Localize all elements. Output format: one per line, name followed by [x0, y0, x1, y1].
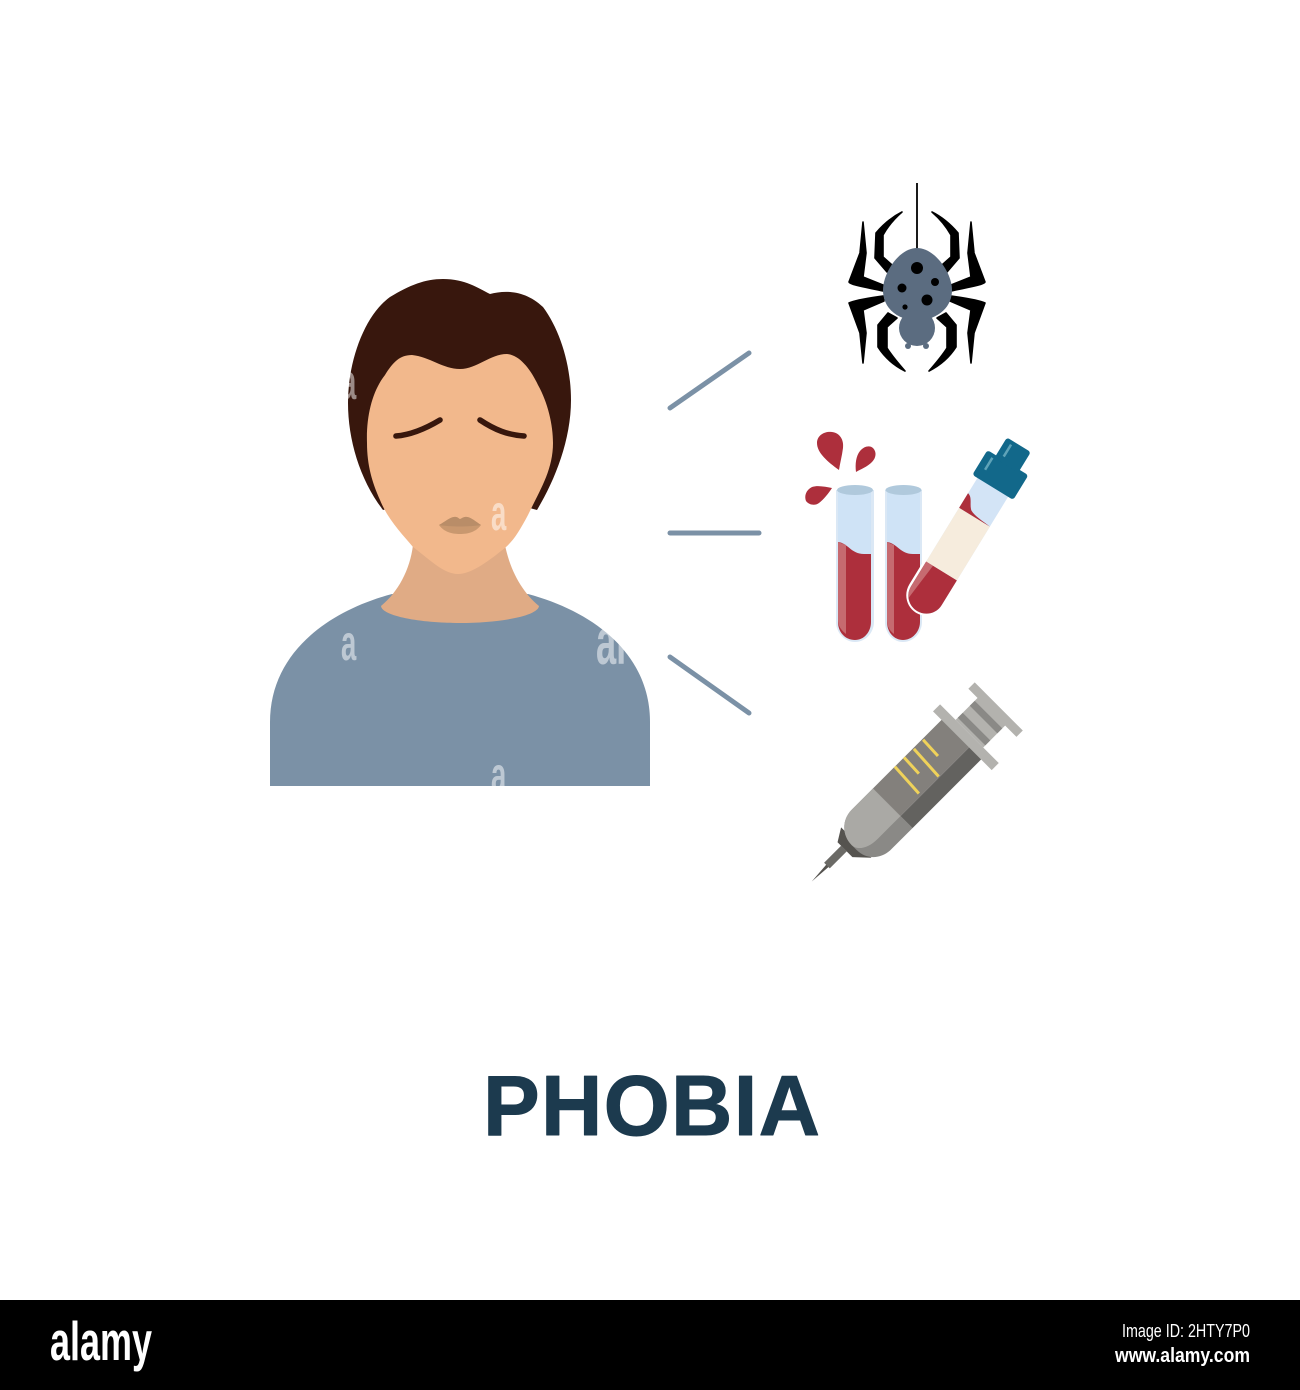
icon: blood tubes	[805, 432, 1039, 642]
blood tube two	[885, 485, 922, 642]
blood tube one	[836, 485, 874, 642]
spider body	[883, 248, 952, 349]
needle	[810, 861, 832, 883]
shirt	[270, 594, 650, 786]
hair	[348, 279, 571, 510]
syringe cone	[832, 827, 871, 867]
title: PHOBIA	[483, 1059, 820, 1154]
connector line: syringe	[670, 657, 749, 713]
watermark fragments	[341, 353, 626, 803]
image id: Image ID: 2HTY7P0	[1122, 1321, 1250, 1341]
plunger shaft	[956, 697, 1006, 747]
needle hub	[824, 846, 847, 868]
plunger stripes	[958, 701, 1002, 745]
left eye	[396, 420, 440, 436]
right eye	[480, 420, 524, 436]
icon: syringe	[787, 676, 1027, 916]
barrel tip lower	[834, 788, 913, 867]
barrel lower	[900, 747, 982, 828]
barrel tip upper	[834, 788, 900, 855]
lips	[439, 517, 481, 534]
spider thread	[916, 183, 918, 253]
spider legs	[849, 212, 985, 371]
watermark fragments: a	[341, 353, 357, 410]
watermark fragments: a	[491, 746, 507, 803]
tilted blood tube	[895, 432, 1039, 625]
footer url: www.alamy.com	[1114, 1345, 1250, 1367]
graduation marks	[893, 739, 949, 795]
spider spots	[898, 262, 939, 310]
footer bar	[0, 1300, 1300, 1390]
neck	[381, 545, 539, 623]
barrel upper	[873, 719, 970, 816]
watermark fragments: al	[596, 606, 626, 679]
person with closed eyes	[270, 279, 650, 786]
face	[367, 354, 553, 574]
plunger flange	[968, 682, 1023, 737]
footer logo: alamy	[50, 1310, 152, 1372]
icon: spider	[849, 183, 985, 371]
connector line: spider	[670, 353, 749, 408]
blood drops	[805, 432, 876, 505]
barrel flange	[933, 704, 999, 770]
watermark fragments: a	[341, 614, 357, 671]
connector line: blood	[670, 530, 759, 536]
watermark fragments: a	[491, 484, 507, 541]
